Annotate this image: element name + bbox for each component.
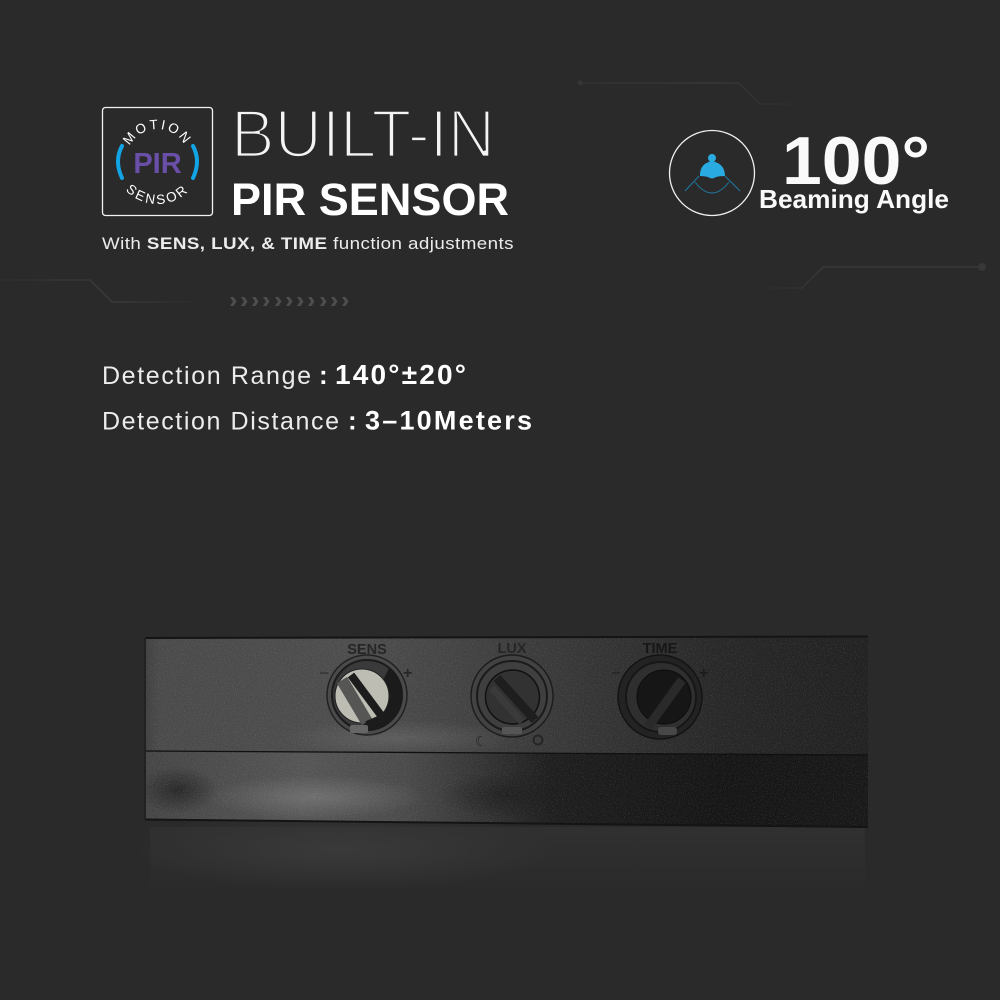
SENS dial: – [320, 664, 329, 681]
detection distance: Detection Distance [102, 408, 339, 436]
icon: PIR motion sensor badge [102, 106, 214, 216]
LUX dial: ☾ [475, 734, 488, 750]
TIME dial: + [699, 665, 708, 682]
detection range: : [319, 360, 328, 390]
housing bottom face [145, 751, 868, 827]
TIME dial [612, 641, 708, 739]
product reflection [130, 810, 865, 897]
product: sensor housing [138, 636, 869, 828]
housing edges [145, 636, 868, 827]
decorative chevrons [230, 297, 348, 306]
PIR label: PIR [133, 148, 182, 180]
detection distance [102, 406, 532, 436]
SENSOR arc label: SENSOR [126, 184, 188, 204]
detection range [102, 359, 466, 390]
TIME dial: – [612, 664, 621, 681]
stat label: Beaming Angle: Beaming Angle [759, 184, 949, 214]
SENS dial [320, 642, 412, 735]
housing top face [145, 637, 868, 755]
SENS dial: + [403, 665, 412, 682]
detection distance: 3–10Meters [365, 406, 532, 436]
MOTION arc label: MOTION [122, 120, 191, 145]
detection range: 140°±20° [335, 359, 466, 390]
LUX dial: LUX [498, 641, 527, 657]
detection distance: : [348, 406, 357, 436]
highlights on housing [234, 782, 398, 812]
LUX dial [471, 641, 553, 750]
icon: beaming angle lamp [670, 130, 754, 216]
SENS dial: SENS [347, 642, 387, 658]
TIME dial: TIME [643, 641, 678, 657]
heading: PIR SENSOR: PIR SENSOR [231, 174, 509, 225]
subheading: With SENS, LUX, & TIME function adjustments [102, 234, 514, 253]
blue arc brackets [118, 146, 197, 178]
stat: 100 degrees: 100° [782, 123, 930, 199]
surface grain [145, 637, 869, 828]
heading: BUILT-IN: BUILT-IN [231, 96, 495, 172]
decorative circuit lines [0, 83, 982, 302]
detection range: Detection Range [102, 362, 311, 390]
